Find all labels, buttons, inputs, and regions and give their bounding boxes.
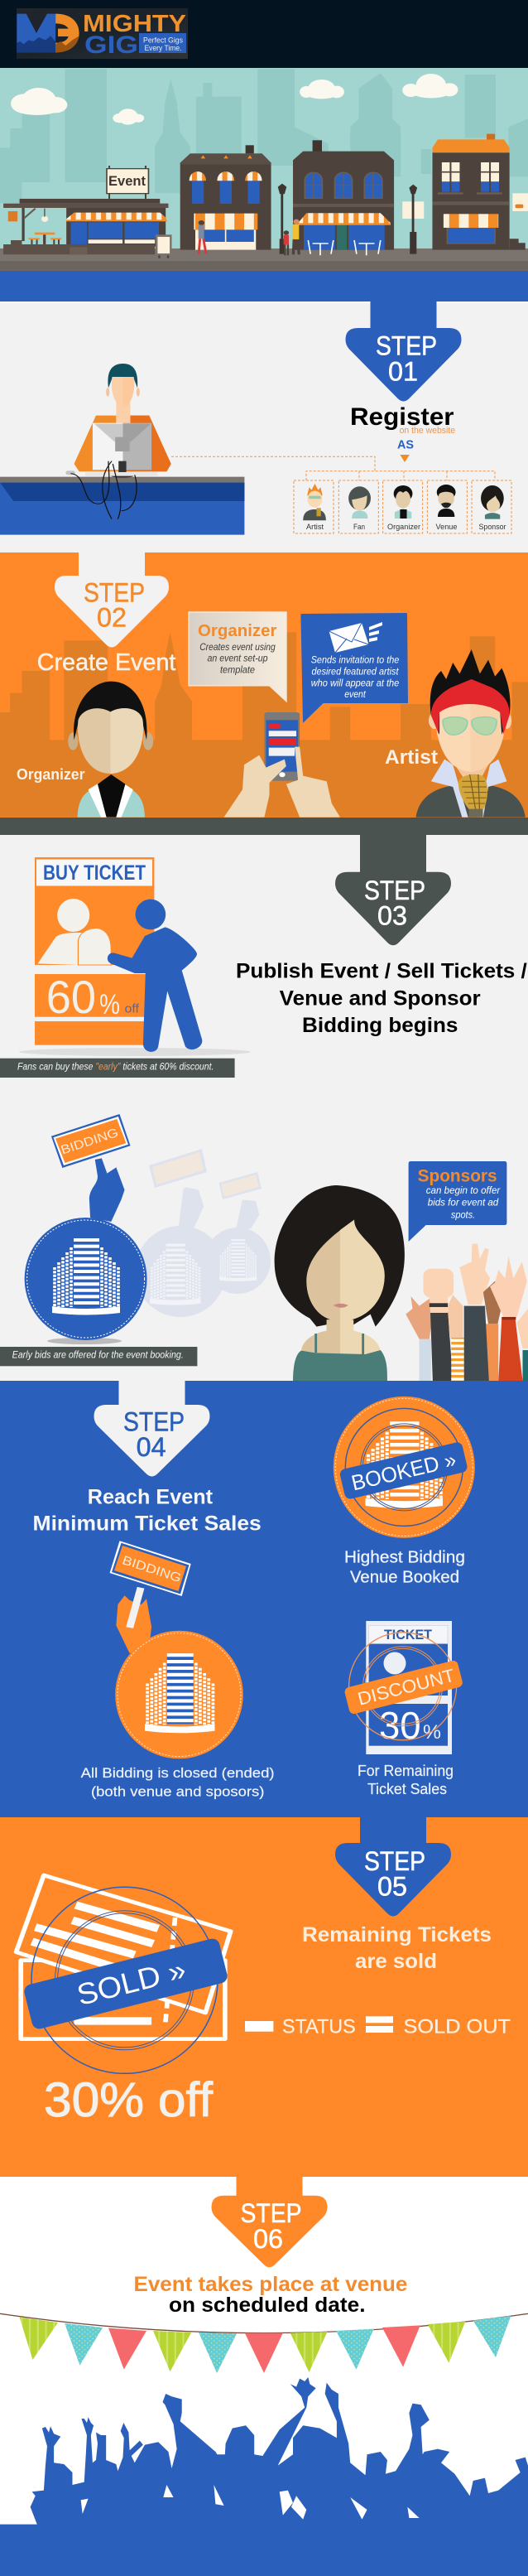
logo: Mighty Gig [17,8,188,59]
clouds [11,74,458,125]
caption: early bids [0,1347,197,1366]
text: bidding closed: (both venue and sposors) [91,1785,264,1800]
bunting flags [0,2313,528,2373]
step 2 arrow [55,552,169,648]
caption: early bids: Early bids are offered for the event booking. [12,1348,184,1360]
role: organizer: Organizer [387,523,420,532]
icon: venue bidding circle [25,1114,147,1344]
icon: envelope [329,622,382,653]
skyline background [0,69,528,203]
role: fan [338,480,378,533]
callout: sponsors: Sponsors [418,1167,497,1186]
step 3 arrow [335,835,451,945]
role: sponsor: Sponsor [478,523,506,532]
logo: Mighty Gig: Every Time. [144,44,182,53]
status line [245,2015,511,2038]
role: venue: Venue [435,523,457,532]
illustration: buy ticket poster: BUY TICKET [43,861,146,885]
illustration: man at computer [0,364,244,535]
icon: microphone [458,774,487,818]
panel: step 2 create event [0,552,528,835]
artist figure [416,649,526,818]
callout: artist invitation: who will appear at the [311,678,399,688]
step 3 arrow: STEP [364,876,425,905]
heading: publish event [236,960,527,1037]
step 6 arrow: 06 [253,2224,283,2254]
heading: remaining tickets: are sold [355,1950,437,1973]
logo: Mighty Gig: Perfect Gigs [143,36,183,45]
heading: publish event: Venue and Sponsor [280,987,481,1010]
step 3 arrow: 03 [377,901,407,931]
text: highest bidding: Highest Bidding [344,1548,465,1566]
heading: event takes place: on scheduled date. [169,2294,366,2317]
heading: reach event minimum [33,1485,262,1536]
illustration: buy ticket poster: % [99,989,120,1020]
icon: venue bidding circle: BIDDING [59,1126,120,1157]
step 4 arrow: STEP [123,1406,185,1436]
step 1 arrow [346,301,462,401]
icon: discount ticket [343,1621,463,1754]
text: remaining ticket sales: Ticket Sales [367,1781,447,1797]
panel: step 4 minimum sales [0,1380,528,1817]
figure: sponsor woman [275,1185,405,1381]
text: highest bidding: Venue Booked [350,1569,459,1587]
role: organizer [383,480,423,533]
role: artist: Artist [306,523,324,532]
heading: reach event minimum: Reach Event [88,1485,214,1508]
icon: sold tickets stamp [17,1875,231,2073]
callout: sponsors: spots. [451,1209,475,1221]
step 5 arrow: STEP [364,1846,425,1876]
role: fan: Fan [353,523,365,532]
building: arched windows cafe [293,140,394,255]
step 1 arrow: 01 [388,356,418,386]
crowd silhouette [0,2377,528,2576]
illustration: raised hands [406,1244,528,1381]
role: venue [427,480,467,533]
step 4 arrow: 04 [137,1432,166,1462]
icon: discount ticket: % [423,1721,441,1744]
building: event cafe [3,199,172,258]
heading: publish event: Publish Event / Sell Tickets / [236,960,527,983]
sidewalk and road [0,248,528,271]
icon: discount ticket: DISCOUNT [356,1665,457,1710]
step 1 arrow: STEP [376,331,437,361]
panel: street scene hero: Event [108,173,146,189]
heading: reach event minimum: Minimum Ticket Sales [33,1512,262,1536]
callout: artist invitation: desired featured artist [311,667,399,677]
icon: sold tickets stamp: SOLD » [74,1952,190,2012]
panel: step 1 register [0,301,528,552]
event sign [107,166,148,199]
panel: header bar [0,0,528,68]
figure: blue person buying ticket [108,900,202,1052]
heading: publish event: Bidding begins [302,1014,458,1037]
logo mark: MG [17,14,79,52]
caption: early tickets [0,1059,235,1078]
building: awning shop [180,145,271,250]
panel: bidding [0,1093,528,1381]
callout: artist invitation [300,613,408,723]
callout: organizer: Creates event using [199,643,276,653]
callout: artist invitation: event [344,690,367,700]
callout: artist invitation: Sends invitation to the [311,656,399,666]
text: bidding closed: All Bidding is closed (ended) [81,1766,275,1781]
logo: Mighty Gig: MIGHTY [83,11,186,37]
shadow under figure [19,1048,251,1056]
heading: event takes place [134,2273,407,2317]
text: bidding closed [81,1766,275,1800]
callout: organizer: template [220,665,255,675]
status line: STATUS [282,2015,356,2038]
panel: step 1 register: on the website [400,426,455,436]
step 6 arrow [212,2177,328,2267]
callout: organizer [189,612,286,702]
panel: step 1 register: AS [397,438,414,452]
faded bidding icons [135,1149,271,1317]
step 6 arrow: STEP [240,2198,301,2228]
orange skyline [0,632,528,818]
panel: step 2 create event: Organizer [17,766,84,783]
callout: organizer: an event set-up [207,654,268,664]
caption: early tickets: Fans can buy these "early" tickets at 60% discount. [17,1061,214,1073]
step 5 arrow [335,1817,451,1917]
heading: remaining tickets: Remaining Tickets [302,1923,492,1946]
illustration: buy ticket poster: 60 [46,971,96,1023]
illustration: buy ticket poster: off [124,1002,140,1015]
heading: remaining tickets [302,1923,492,1973]
callout: organizer: Organizer [198,622,277,640]
step 2 arrow: 02 [97,603,127,633]
pedestrians [199,219,300,255]
panel: step 2 create event: Artist [385,746,438,769]
icon: bidding closed circle [110,1541,243,1758]
callout: sponsors: bids for event ad [428,1197,499,1208]
icon: discount ticket: 30 [379,1704,421,1747]
icon: bidding closed circle: BIDDING [121,1553,183,1585]
icon: booked stamp: BOOKED » [349,1447,458,1495]
text: remaining ticket sales [358,1763,454,1797]
text: remaining ticket sales: For Remaining [358,1763,454,1779]
step 4 arrow [94,1380,210,1476]
icon: booked stamp [334,1397,475,1538]
illustration: buy ticket poster [35,857,154,1045]
role: sponsor [472,480,511,533]
panel: step 5 sold [0,1817,528,2177]
logo: Mighty Gig: GIG [84,31,138,59]
panel: step 1 register: Register [350,403,454,431]
callout: sponsors: can begin to offer [426,1184,501,1196]
organizer figure [68,682,153,818]
step 5 arrow: 05 [377,1872,407,1902]
faded buildings [150,1239,257,1305]
panel: step 3 publish event [0,835,528,1093]
status line: SOLD OUT [404,2015,511,2038]
phone in hands [224,712,340,818]
icon: discount ticket: TICKET [384,1627,433,1643]
street lamps [278,184,424,254]
role chart connectors [171,456,495,480]
text: highest bidding [344,1548,465,1587]
text: 30 percent off: 30% off [44,2073,214,2127]
panel: step 6 event [0,2177,528,2576]
panel: street scene hero [0,68,528,301]
callout: sponsors [409,1161,506,1242]
role: artist [294,480,334,533]
building: orange roof house [432,134,528,250]
heading: create event: Create Event [37,649,175,676]
heading: event takes place: Event takes place at venue [134,2273,407,2296]
step 2 arrow: STEP [84,578,145,608]
